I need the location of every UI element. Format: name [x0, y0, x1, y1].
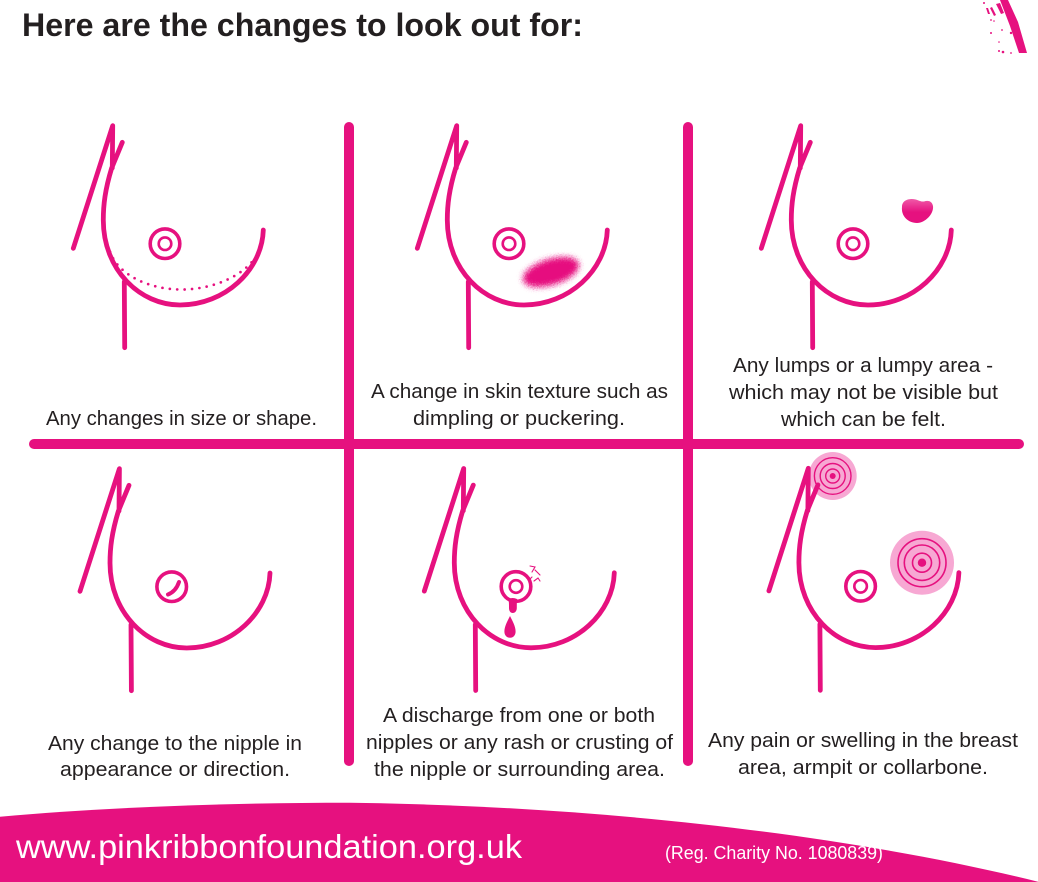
panel: nipple change — [48, 469, 302, 781]
charity number: (Reg. Charity No. 1080839) — [665, 843, 883, 863]
website url: www.pinkribbonfoundation.org.uk — [15, 828, 523, 865]
caption: the nipple or surrounding area. — [374, 758, 665, 781]
caption: Any pain or swelling in the breast — [708, 729, 1018, 752]
decorative ribbon splash — [983, 0, 1027, 54]
footer band — [0, 803, 1038, 882]
caption: Any lumps or a lumpy area - — [733, 354, 993, 377]
icon: breast with pain targets — [769, 452, 959, 690]
caption — [728, 354, 998, 431]
caption — [371, 380, 668, 430]
caption: dimpling or puckering. — [413, 407, 625, 430]
icon: breast with lump — [761, 126, 951, 348]
panel: pain or swelling — [708, 452, 1018, 779]
panel: skin texture — [371, 126, 668, 430]
icon: breast with altered nipple — [80, 469, 270, 691]
panel: size or shape — [46, 126, 317, 430]
icon: breast with discharge and rash — [424, 468, 614, 690]
caption: Any change to the nipple in — [48, 732, 302, 755]
caption: which can be felt. — [780, 408, 946, 431]
panel: discharge — [366, 468, 673, 781]
panel: lumps — [728, 126, 998, 431]
icon: breast with dotted outline — [73, 126, 263, 348]
caption: Any changes in size or shape. — [46, 407, 317, 430]
icon: breast pain target — [890, 531, 954, 595]
caption — [708, 729, 1018, 779]
caption: A discharge from one or both — [383, 704, 655, 727]
caption — [366, 704, 673, 781]
title: Here are the changes to look out for: — [22, 7, 583, 43]
caption — [48, 732, 302, 781]
grid dividers — [29, 122, 1024, 766]
caption: nipples or any rash or crusting of — [366, 731, 673, 754]
icon: collarbone pain target — [809, 452, 857, 500]
caption: area, armpit or collarbone. — [738, 756, 988, 779]
icon: breast with dimpled patch — [417, 126, 607, 348]
caption: appearance or direction. — [60, 758, 290, 781]
caption: which may not be visible but — [728, 381, 998, 404]
caption: A change in skin texture such as — [371, 380, 668, 403]
